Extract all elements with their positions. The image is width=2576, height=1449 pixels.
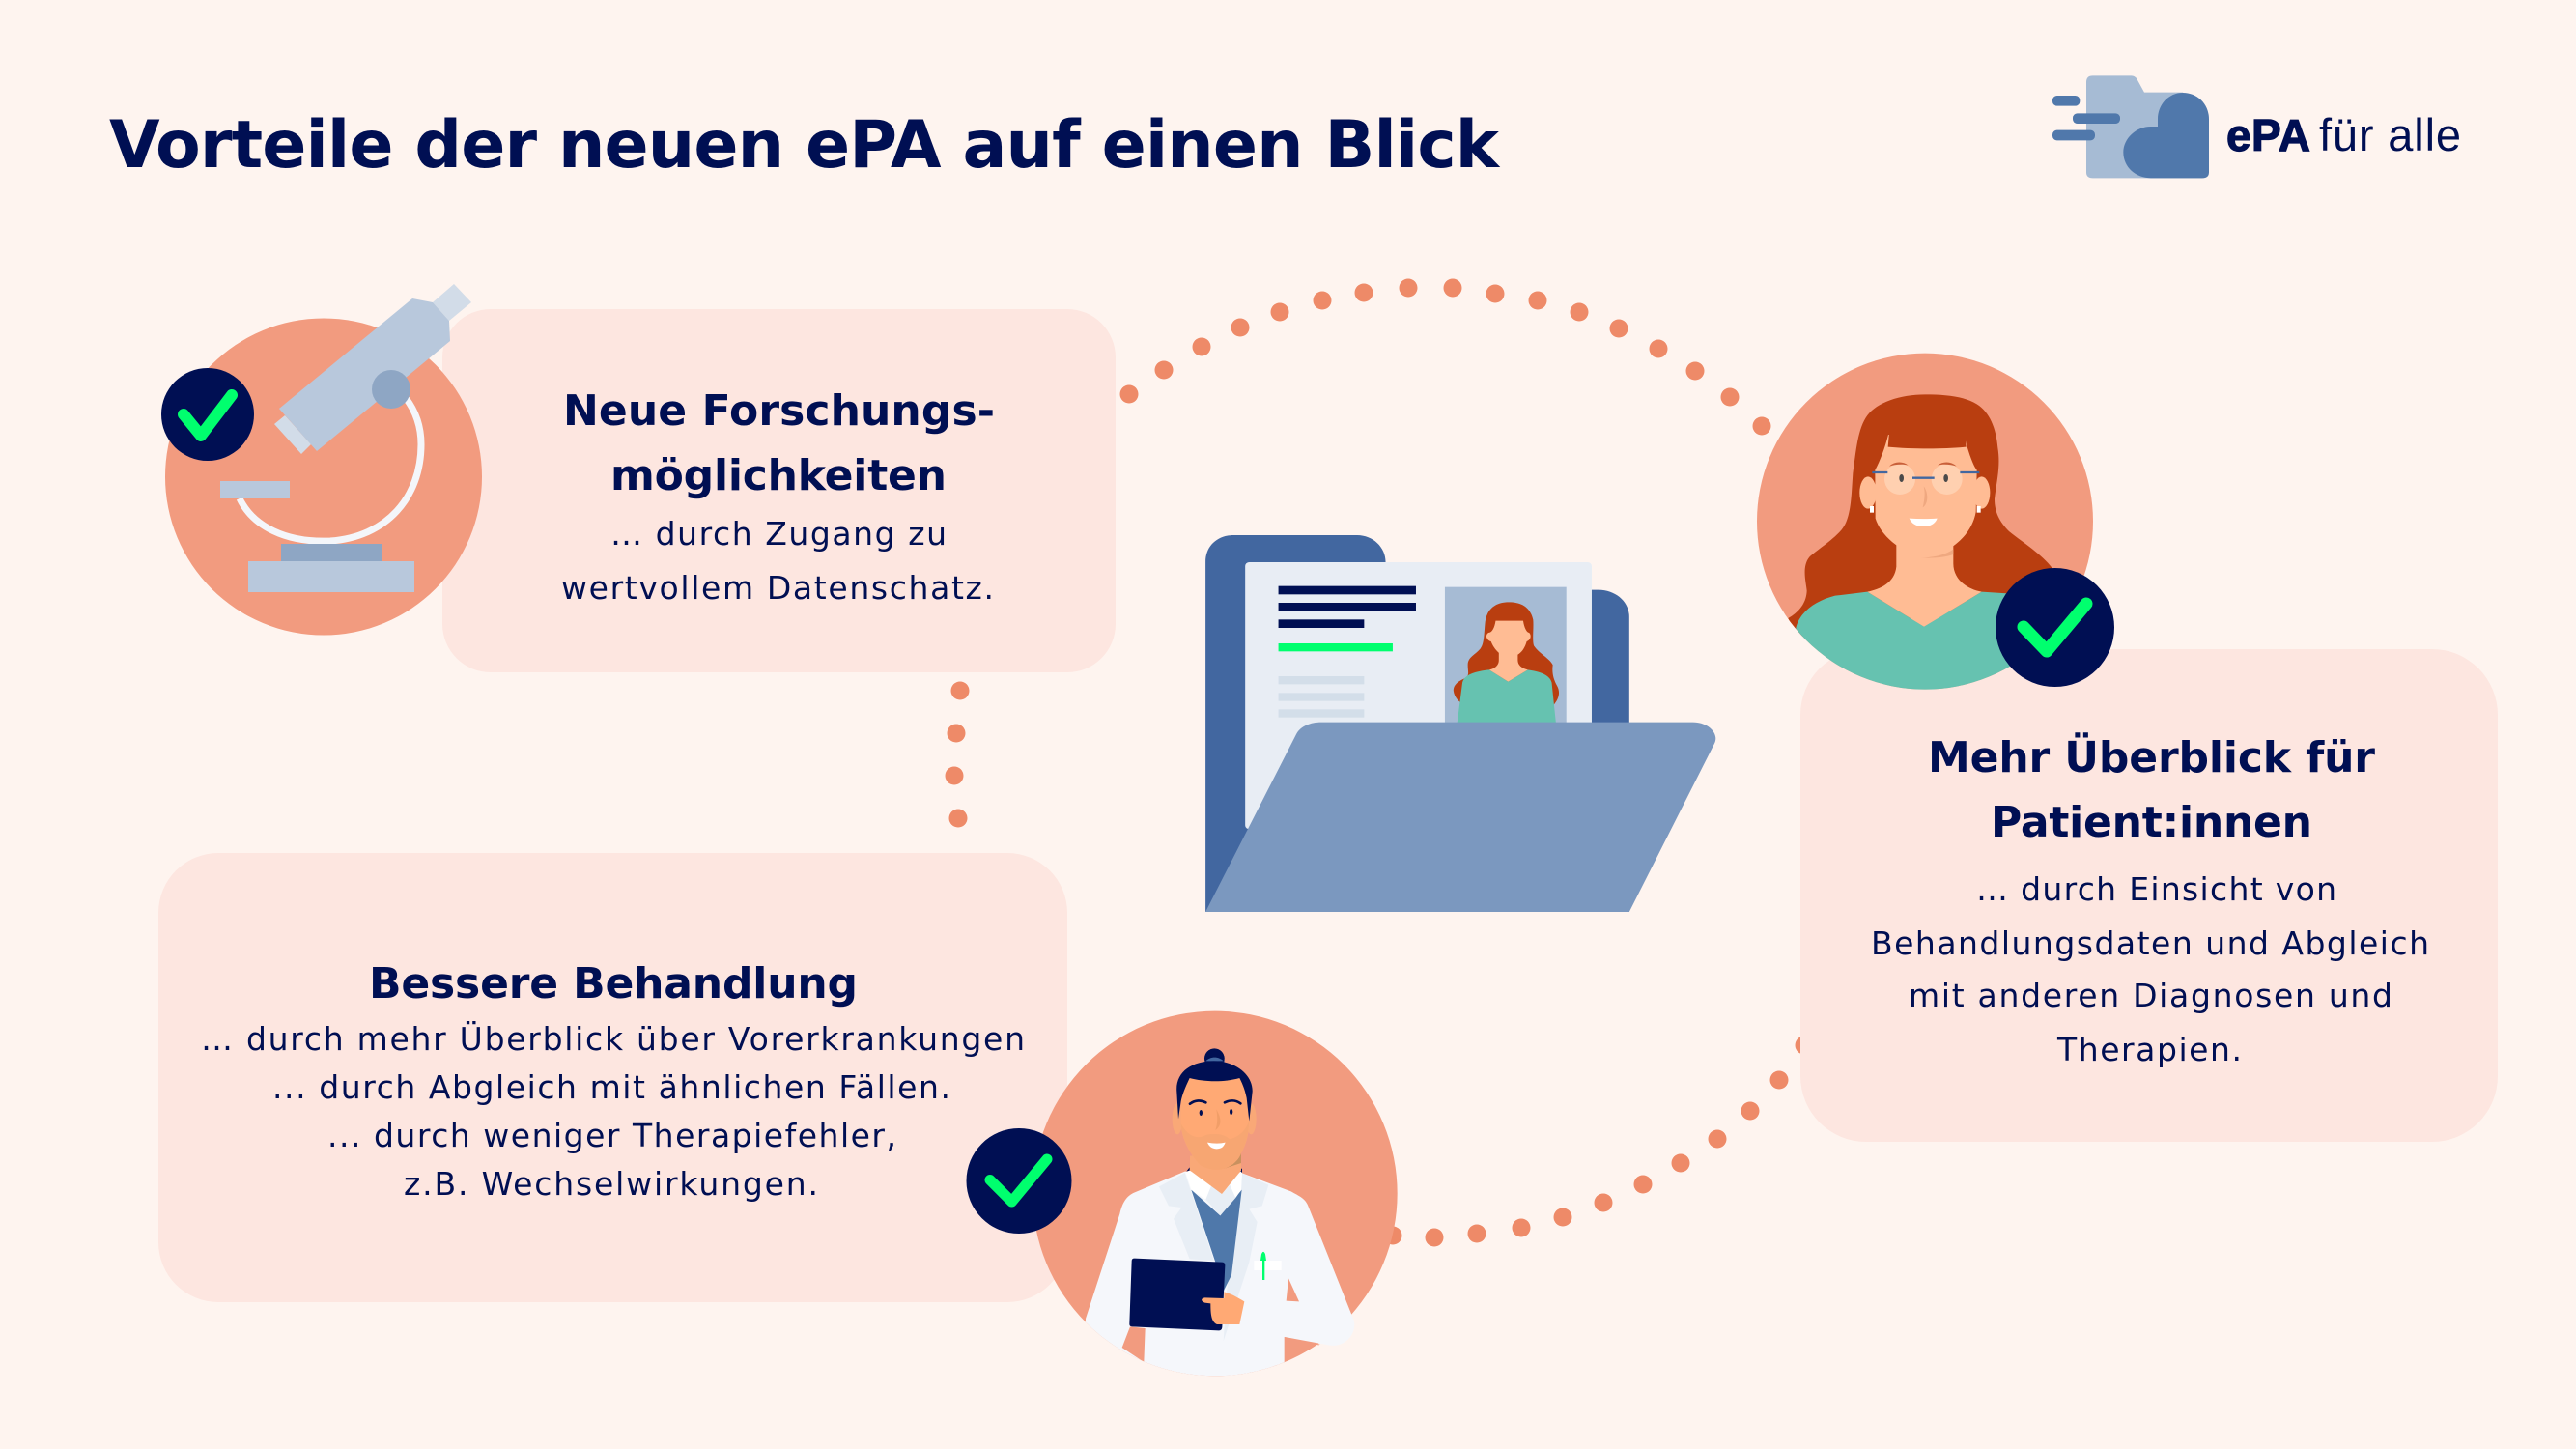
research body text: … durch Zugang zu xyxy=(610,515,947,553)
research card xyxy=(442,309,1116,672)
icon: check badge xyxy=(161,368,254,461)
icon: microscope xyxy=(220,284,471,592)
overview heading xyxy=(1928,731,2375,847)
document sheet xyxy=(1245,562,1592,829)
title: Vorteile der neuen ePA auf einen Blick xyxy=(109,107,1501,184)
document lines xyxy=(1279,586,1416,718)
treatment body text: ... durch Abgleich mit ähnlichen Fällen. xyxy=(272,1068,950,1106)
overview heading: Patient:innen xyxy=(1991,798,2312,847)
logo: ePA für alle xyxy=(2052,75,2461,178)
overview body text: mit anderen Diagnosen und xyxy=(1909,977,2392,1014)
illustration: woman portrait xyxy=(1757,354,2093,693)
overview body text: … durch Einsicht von xyxy=(1976,870,2336,908)
research circle xyxy=(165,319,482,636)
icon: check badge xyxy=(1996,568,2114,687)
overview body text: Behandlungsdaten und Abgleich xyxy=(1871,924,2429,962)
treatment body text: ... durch weniger Therapiefehler, xyxy=(327,1117,896,1154)
panel: overview for patients xyxy=(1757,354,2498,1142)
dotted connector: top arc xyxy=(1120,278,1771,435)
dotted connector: left vertical xyxy=(945,682,970,827)
treatment body text: … durch mehr Überblick über Vorerkrankungen xyxy=(201,1019,1025,1058)
treatment body text xyxy=(201,1019,1025,1203)
logo icon: folder with heart xyxy=(2052,75,2209,178)
logo wordmark: für alle xyxy=(2319,109,2461,160)
overview body text: Therapien. xyxy=(2056,1031,2242,1068)
folder back xyxy=(1205,535,1629,912)
research body text: wertvollem Datenschatz. xyxy=(561,569,994,607)
treatment body text: z.B. Wechselwirkungen. xyxy=(404,1165,818,1203)
illustration: patient folder xyxy=(1205,535,1715,912)
treatment heading: Bessere Behandlung xyxy=(369,959,858,1009)
research heading: Neue Forschungs- xyxy=(563,386,995,436)
icon: check badge xyxy=(966,1128,1072,1234)
overview heading: Mehr Überblick für xyxy=(1928,731,2375,782)
folder front xyxy=(1205,723,1715,912)
research heading: möglichkeiten xyxy=(610,451,947,500)
research body text xyxy=(561,515,994,607)
panel: research xyxy=(161,284,1116,672)
overview body text xyxy=(1871,870,2429,1068)
logo wordmark: ePA xyxy=(2226,110,2310,160)
overview card xyxy=(1800,649,2498,1142)
dotted connector: bottom arc xyxy=(1383,1036,1814,1246)
panel: better treatment xyxy=(158,853,1398,1381)
treatment card xyxy=(158,853,1067,1302)
logo wordmark xyxy=(2226,109,2461,160)
patient photo xyxy=(1445,587,1567,724)
illustration: doctor portrait xyxy=(1033,1011,1398,1381)
research heading xyxy=(563,386,995,500)
